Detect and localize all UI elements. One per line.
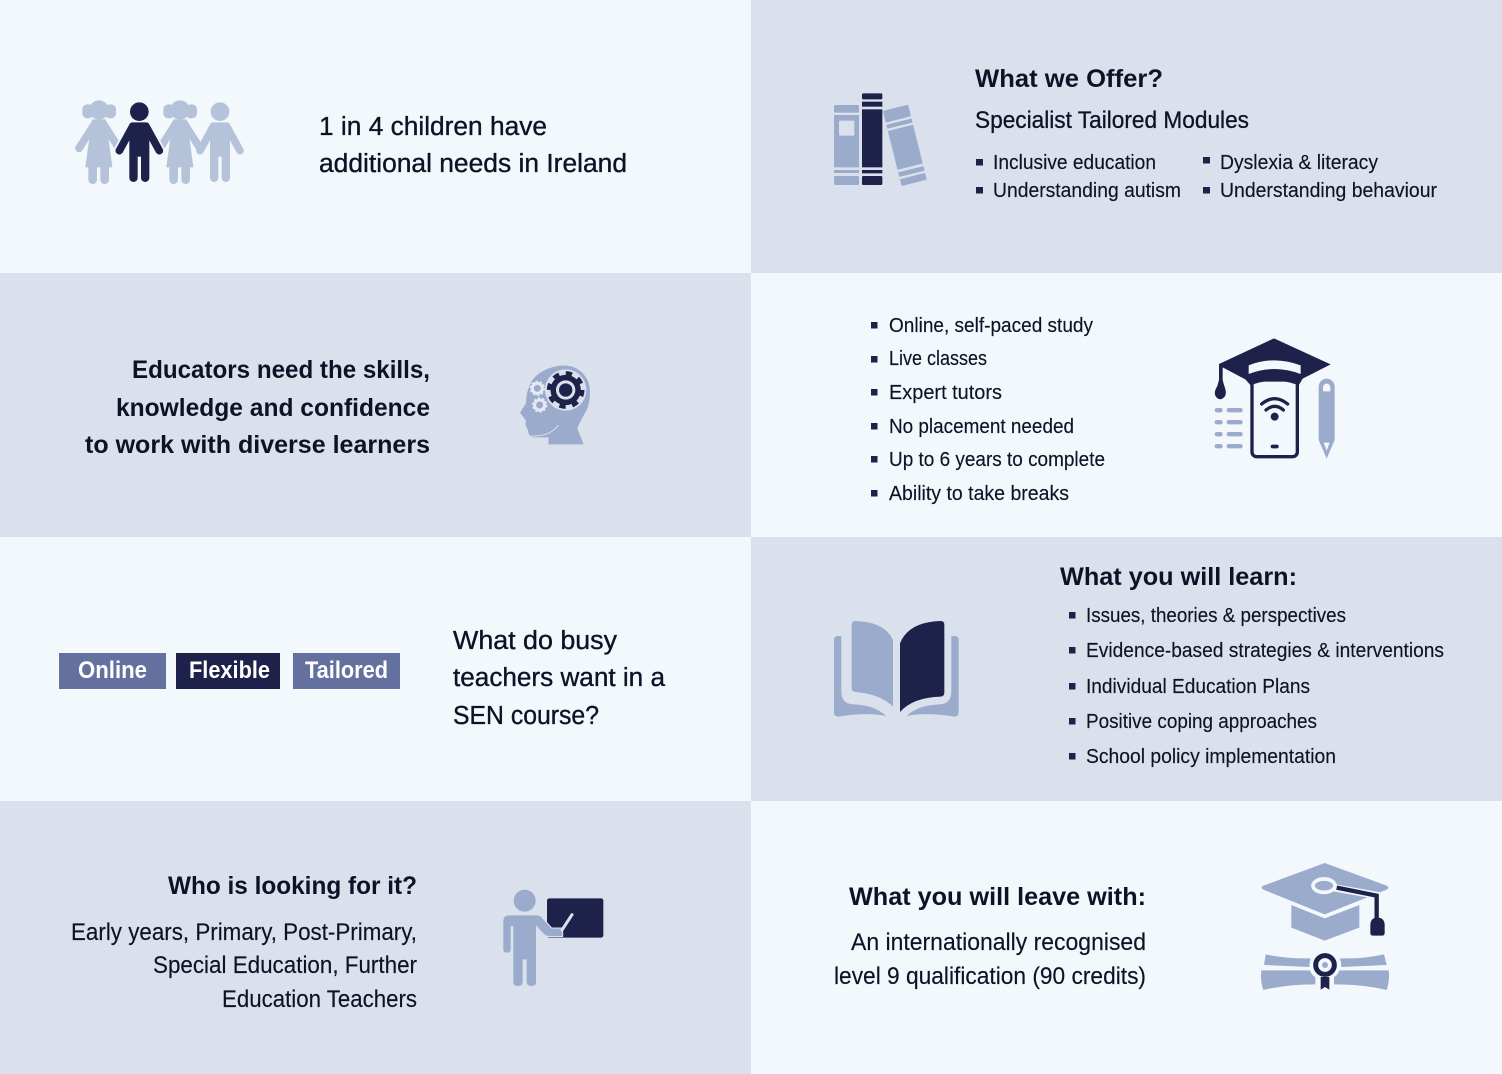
- list: study features: Online, self-paced study: [889, 315, 1093, 337]
- heading: who is looking for it: Who is looking for it?: [168, 872, 417, 900]
- list: learning topics: [1069, 605, 1444, 768]
- list: learning topics: School policy implementation: [1086, 746, 1336, 768]
- badge: flexible: [176, 653, 280, 689]
- list: learning topics: Issues, theories & perspectives: [1086, 605, 1346, 627]
- list: modules: Understanding autism: [993, 180, 1181, 202]
- text: audience description: Special Education, Further: [153, 952, 417, 979]
- heading: educators need skills: knowledge and confidence: [116, 394, 430, 422]
- text: what do busy teachers want: What do busy: [453, 627, 617, 655]
- list: study features: No placement needed: [889, 416, 1074, 438]
- text: one in four children: 1 in 4 children have: [319, 113, 547, 141]
- panel: leave with background: [751, 801, 1502, 1074]
- list: learning topics: Evidence-based strategies & interventions: [1086, 640, 1444, 662]
- text: qualification: [834, 929, 1146, 990]
- heading: educators need skills: Educators need the skills,: [132, 356, 430, 384]
- text: qualification: An internationally recognised: [851, 929, 1146, 956]
- text: audience description: Early years, Primary, Post-Primary,: [71, 919, 417, 946]
- panel: busy teachers background: [0, 537, 751, 801]
- icon: books: [834, 93, 927, 186]
- text: audience description: Education Teachers: [222, 986, 417, 1013]
- icon: mortarboard and diploma: [1261, 863, 1389, 990]
- badge: tailored: Tailored: [305, 657, 388, 684]
- list: modules: [976, 152, 1437, 202]
- text: what do busy teachers want: [453, 627, 666, 730]
- list: study features: [871, 315, 1105, 505]
- heading: what we offer: What we Offer?: [975, 65, 1163, 93]
- icon: open book: [834, 621, 959, 717]
- list: modules: Dyslexia & literacy: [1220, 152, 1378, 174]
- panel: children statistic background: [0, 0, 751, 273]
- badge: online: [59, 653, 166, 689]
- text: one in four children: additional needs in Ireland: [319, 150, 627, 178]
- heading: educators need skills: [85, 356, 430, 459]
- list: study features: Live classes: [889, 348, 987, 370]
- icon: teacher at board: [503, 890, 603, 986]
- panel: study features background: [751, 273, 1502, 537]
- heading: what you will leave with: What you will leave with:: [849, 883, 1146, 911]
- list: study features: Ability to take breaks: [889, 483, 1069, 505]
- badge: online: Online: [78, 657, 147, 684]
- list: study features: Expert tutors: [889, 382, 1002, 404]
- panel: who is looking background: [0, 801, 751, 1074]
- icon: four children holding hands: [79, 100, 240, 184]
- text: what do busy teachers want: teachers want in a: [453, 664, 666, 692]
- heading: educators need skills: to work with diverse learners: [85, 431, 430, 459]
- heading: what you will learn: What you will learn:: [1060, 563, 1297, 591]
- list: learning topics: Individual Education Plans: [1086, 676, 1310, 698]
- list: modules: Understanding behaviour: [1220, 180, 1437, 202]
- badge: flexible: Flexible: [189, 657, 270, 684]
- list: study features: Up to 6 years to complete: [889, 449, 1105, 471]
- text: qualification: level 9 qualification (90 credits): [834, 963, 1146, 990]
- list: learning topics: Positive coping approaches: [1086, 711, 1317, 733]
- text: what do busy teachers want: SEN course?: [453, 702, 599, 730]
- panel: educators background: [0, 273, 751, 537]
- subheading: specialist tailored modules: Specialist Tailored Modules: [975, 107, 1249, 134]
- icon: head with gears: [520, 366, 590, 444]
- panel: what you will learn background: [751, 537, 1502, 801]
- badge: tailored: [293, 653, 400, 689]
- icon: graduation cap over phone: [1215, 338, 1335, 459]
- panel: what we offer background: [751, 0, 1502, 273]
- text: one in four children: [319, 113, 627, 178]
- list: modules: Inclusive education: [993, 152, 1156, 174]
- text: audience description: [71, 919, 417, 1013]
